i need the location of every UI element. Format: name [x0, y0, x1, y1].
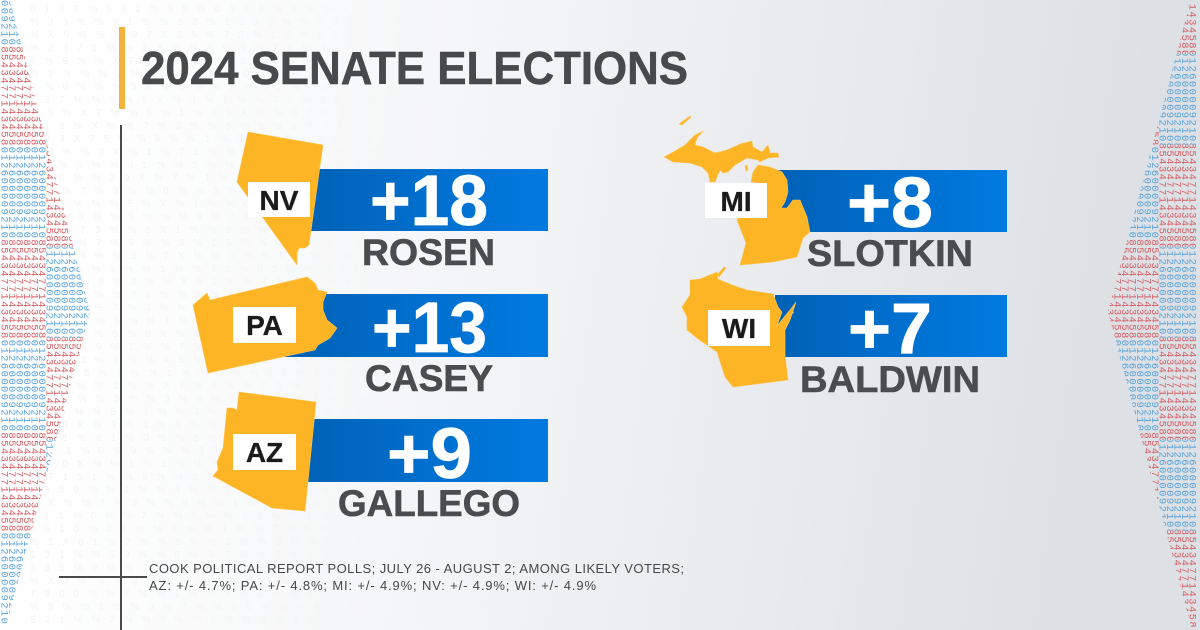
faint number texture: 519%X%%7%3%%5%9%3%71%%05%%9 — [30, 121, 468, 132]
faint number texture: 7900%%7%%1%%5%3%%9%0%%71%%5 — [30, 589, 470, 600]
result: Nevada — [237, 132, 548, 273]
faint number texture: 037%%9%5X%3%1%%70%93%%%51%7 — [30, 95, 464, 106]
faint number texture: %9%%0X%1%73%%5%9%31%0%%%75% — [30, 147, 471, 158]
right digit pattern: 143458012600009210854347714345801260000921085434771434580126000092108543477143458 — [1163, 4, 1175, 629]
faint number texture: 5%9%%X75%%71%3%90%%57%193%0 — [30, 56, 461, 67]
faint number texture: X5%%7%9%%3%15%%07%%93%1%%5% — [30, 238, 471, 249]
left pattern backing — [0, 0, 90, 630]
left digit pattern — [0, 0, 92, 629]
faint number texture: 7X9%%5%1%%3%7%%09%%51%%73%% — [30, 407, 471, 418]
faint number texture: 7%%3%9%%X5%%1%07%%3%9%5%%%1 — [30, 355, 474, 366]
faint number texture — [30, 4, 480, 626]
state label: WI — [708, 310, 770, 346]
state shape: Pennsylvania — [193, 277, 337, 373]
left digit pattern: 143458012600009210854347714345801260000921085434771434580126000092108543477143458 — [80, 4, 92, 629]
faint number texture: 0510%09%%3%%1%%7%5%%9%3%%0% — [30, 524, 470, 535]
margin: +8: +8 — [847, 164, 933, 243]
bar: Wisconsin — [775, 295, 1007, 357]
faint number texture: %X7%%5%%3%9%1%%%07%5%3%%19% — [30, 394, 474, 405]
left digit pattern: 009210854347714345801260000921085434771434580126000092108543477143458012600009210 — [28, 0, 40, 625]
state label: PA — [233, 307, 296, 343]
state shape: Nevada — [237, 132, 323, 265]
left digit pattern: 143458012600009210854347714345801260000921085434771434580126000092108543477143458 — [42, 4, 54, 629]
state label: MI: MI — [720, 186, 752, 217]
left digit pattern: 143458012600009210854347714345801260000921085434771434580126000092108543477143458 — [65, 4, 77, 629]
faint number texture: 131%%59%%0%%7%%3%1%%59%%07% — [30, 550, 470, 561]
faint number texture: %1%%%3%X7%%5903%%1%%79%35%1 — [30, 69, 468, 80]
left digit pattern: 143458012600009210854347714345801260000921085434771434580126000092108543477143458 — [58, 4, 70, 629]
result: Pennsylvania — [193, 277, 548, 399]
faint number texture: %X%9%5%%1%37%%0%%9%5%%13%7% — [30, 316, 474, 327]
vertical axis line — [120, 125, 122, 630]
faint number texture: 3%1%%5%9X%%73%%1%0%%59%%7%3 — [30, 329, 471, 340]
state label: PA: PA — [246, 310, 283, 341]
right digit pattern: 143458012600009210854347714345801260000921085434771434580126000092108543477143458 — [1178, 4, 1190, 629]
state label: AZ: AZ — [246, 437, 283, 468]
faint number texture: 593X75%%9%%1%3%7%%095%31%%7 — [30, 134, 461, 145]
right digit pattern — [1103, 0, 1198, 629]
faint number texture: %7%%9%3%%X51%%7%0%%93%%5%%1 — [30, 277, 474, 288]
state shape: Michigan — [664, 116, 810, 265]
faint number texture: 350%%39X%7%1%5%%90%3%%71%%9 — [30, 173, 464, 184]
state label: MI — [705, 183, 767, 218]
left digit pattern: 009210854347714345801260000921085434771434580126000092108543477143458012600009210 — [35, 0, 47, 625]
candidate: Slotkin: SLOTKIN — [807, 233, 973, 274]
faint number texture: 379%%%5%X%1%%07%9%%3%51%%X7 — [30, 199, 469, 210]
state label: NV — [248, 182, 310, 217]
faint number texture: %X%%7%3%%9%%1%%50%%73%%91%% — [30, 498, 478, 509]
right digit pattern: 009210854347714345801260000921085434771434580126000092108543477143458012600009210 — [1133, 0, 1145, 625]
faint number texture: %93X%3%1%9%%7%0%5%%%3%19%%7 — [30, 420, 471, 431]
right digit pattern: 143458012600009210854347714345801260000921085434771434580126000092108543477143458 — [1156, 4, 1168, 629]
left digit pattern: 009210854347714345801260000921085434771434580126000092108543477143458012600009210 — [20, 0, 32, 625]
faint number texture: %33%%91%%53%1190%%5017%3%91 — [30, 17, 456, 28]
result: Wisconsin — [682, 267, 1007, 400]
faint number texture: %%1%0%9%%%3%7%5%%1%09%%3%7% — [30, 446, 476, 457]
faint number texture: %7151%%9%%3%%0%7%%15%%93%0% — [30, 472, 470, 483]
title accent bar — [119, 27, 125, 109]
faint number texture: 07%3%%91%%5%%073%%1%9%%X53% — [30, 160, 468, 171]
faint number texture: %9%%1%%3%7%%05%%%9%3%%1%%7% — [30, 602, 480, 613]
faint number texture: 9%%7%3%%0%%5%13%7%%9%%3%1%5 — [30, 186, 473, 197]
faint number texture: 9%3%%1%%X7%5%%03%%9%%17%%5% — [30, 381, 474, 392]
faint number texture: 7%1%X1%0%%5%9%%37%%1%%05%%9 — [30, 433, 471, 444]
faint number texture: %3X%9%1%%7%%5%03%%9%%17%5%% — [30, 342, 474, 353]
state label: NV: NV — [260, 185, 299, 216]
candidate: Gallego: GALLEGO — [338, 483, 520, 524]
source footnote: AZ: +/- 4.7%; PA: +/- 4.8%; MI: +/- 4.9%; NV: +/- 4.9%; WI: +/- 4.9% — [149, 578, 596, 593]
faint number texture: %X9%%%97X35%73%19%05%%7%391 — [30, 30, 459, 41]
faint number texture: 9%%5%%71%%3%%09%5%%7%1%3%%% — [30, 290, 476, 301]
right digit pattern: 009210854347714345801260000921085434771434580126000092108543477143458012600009210 — [1110, 0, 1122, 625]
right digit pattern: 009210854347714345801260000921085434771434580126000092108543477143458012600009210 — [1118, 0, 1130, 625]
right digit pattern: 009210854347714345801260000921085434771434580126000092108543477143458012600009210 — [1148, 0, 1160, 625]
margin: +7: +7 — [848, 290, 932, 369]
faint number texture: %1X61%7%%5%%3%%9%%01%%75%%3 — [30, 537, 471, 548]
faint number texture: 335%9%%7%%1%%0%%53%%9%%71%% — [30, 563, 473, 574]
left digit pattern: 009210854347714345801260000921085434771434580126000092108543477143458012600009210 — [5, 0, 17, 625]
source footnote — [149, 561, 684, 593]
faint number texture: 9%0%%%3X%5%%7%91%30%%53%%79 — [30, 82, 468, 93]
faint number texture: 9%%73%%5X1%%0%%79%3%%51%%%7 — [30, 225, 471, 236]
bar: Pennsylvania — [285, 294, 548, 357]
result: Arizona — [213, 392, 548, 524]
left digit pattern: 143458012600009210854347714345801260000921085434771434580126000092108543477143458 — [50, 4, 62, 629]
right digit pattern: 009210854347714345801260000921085434771434580126000092108543477143458012600009210 — [1126, 0, 1138, 625]
bay gap — [777, 310, 794, 330]
candidate: Rosen: ROSEN — [362, 232, 495, 273]
faint number texture: %5%9%%3%7X%%1%%50%9%%73%%1% — [30, 251, 474, 262]
left digit pattern: 143458012600009210854347714345801260000921085434771434580126000092108543477143458 — [72, 4, 84, 629]
state shape: Wisconsin — [682, 267, 796, 387]
candidate: Casey: CASEY — [365, 358, 493, 399]
result: Michigan — [664, 116, 1007, 274]
title: 2024 SENATE ELECTIONS — [141, 42, 688, 94]
left digit pattern: 009210854347714345801260000921085434771434580126000092108543477143458012600009210 — [12, 0, 24, 625]
source footnote: COOK POLITICAL REPORT POLLS; JULY 26 - AUGUST 2; AMONG LIKELY VOTERS; — [149, 561, 684, 576]
state label: WI: WI — [722, 313, 756, 344]
right digit pattern: 143458012600009210854347714345801260000921085434771434580126000092108543477143458 — [1186, 4, 1198, 629]
faint number texture: 5%9%%7%3%%%1%50%%9%%73%1%%5 — [30, 303, 473, 314]
bar: Nevada — [300, 169, 548, 231]
faint number texture: 375%%9%%1%%73%05%%%9%1%%X3% — [30, 264, 471, 275]
bar: Michigan — [775, 170, 1007, 232]
margin: +13: +13 — [372, 289, 487, 368]
faint number texture: %%%5%7%%1%%3%%90%5%7%%13%%9 — [30, 368, 476, 379]
right digit pattern: 143458012600009210854347714345801260000921085434771434580126000092108543477143458 — [1170, 4, 1182, 629]
horizontal axis line — [59, 576, 147, 578]
faint number texture: 9559%%1%%3%%7%0%%59%%1%3%%7 — [30, 485, 470, 496]
faint number texture: %9%X7%%5%1%93X%%07%3%5%91%% — [30, 108, 469, 119]
candidate: Baldwin: BALDWIN — [800, 359, 980, 400]
faint number texture: 9%0X%%1%3%%7%5%%90%%%31%%75 — [30, 459, 471, 470]
faint number texture: 7X%9%%5%%%3%71%%09%%53%%7%1 — [30, 212, 471, 223]
right digit pattern: 009210854347714345801260000921085434771434580126000092108543477143458012600009210 — [1103, 0, 1115, 625]
state label: AZ — [233, 434, 296, 470]
faint number texture: %3371%%3X%%5%9%70%39%15%%73 — [30, 43, 461, 54]
bar: Arizona — [300, 419, 548, 482]
faint number texture: 311%0%%7%%5%%93%%1%%07%5%%9 — [30, 511, 469, 522]
faint number texture: 531%%7%%9%%0%%5%1%%73%%9%%0 — [30, 615, 473, 626]
state shape: Arizona — [213, 392, 316, 511]
faint number texture: %X7%%%3%9%%5%1%%07%%3%5%%9% — [30, 576, 478, 587]
faint number texture: 0193%591%55%0379%1%%3591%07 — [30, 4, 446, 15]
right digit pattern: 009210854347714345801260000921085434771434580126000092108543477143458012600009210 — [1140, 0, 1152, 625]
margin: +18: +18 — [370, 162, 488, 241]
margin: +9: +9 — [387, 415, 472, 494]
